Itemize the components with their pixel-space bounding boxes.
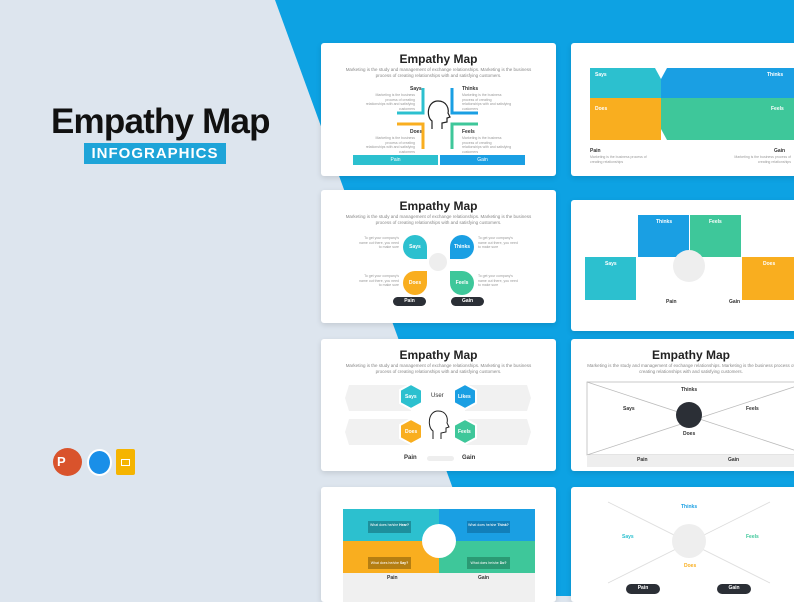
- card 5: hexagons: Pain: [404, 455, 417, 461]
- card 8: x lines with pills: Pain: [638, 585, 648, 591]
- card 2: four colored panels: Feels: [771, 106, 784, 112]
- card 3: petals: To get your company's name out there, you need to make sure: [478, 236, 518, 249]
- card 1: empathy map with head: [321, 43, 556, 176]
- card 6: x-frame: Empathy Map: [652, 348, 730, 362]
- card 8: x lines with pills: [571, 487, 794, 602]
- card 7: quadrants: What does he/she Do?: [470, 561, 506, 565]
- card 1: empathy map with head: Does: [410, 129, 422, 135]
- card 4: boxes: Feels: [709, 219, 722, 225]
- card 6: x-frame: Gain: [728, 457, 739, 463]
- card 2: four colored panels: Thinks: [767, 72, 783, 78]
- card 6: x-frame: Pain: [637, 457, 648, 463]
- card 6: x-frame: Says: [623, 406, 635, 412]
- card 3: petals: Does: [409, 280, 421, 286]
- card 8: x lines with pills: Feels: [746, 534, 759, 540]
- card 4: boxes: Thinks: [656, 219, 672, 225]
- card 2: four colored panels: Gain: [774, 148, 785, 154]
- card 2: four colored panels: Does: [595, 106, 607, 112]
- card 1: empathy map with head: Marketing is the business process of creating relationships with and satisfying customers: [366, 136, 415, 154]
- card 3: petals: [321, 190, 556, 323]
- card 7: quadrants: [321, 487, 556, 602]
- icon: powerpoint: P: [57, 454, 66, 469]
- card 3: petals: Empathy Map: [399, 199, 478, 213]
- card 7: quadrants: What does he/she Hear?: [370, 523, 409, 527]
- icon: keynote: [87, 449, 112, 476]
- card 3: petals: To get your company's name out there, you need to make sure: [359, 274, 399, 287]
- card 3: petals: To get your company's name out there, you need to make sure: [478, 274, 518, 287]
- card 1: empathy map with head: Marketing is the business process of creating relationships with and satisfying customers: [462, 136, 511, 154]
- card 6: x-frame: Feels: [746, 406, 759, 412]
- card 5: hexagons: Gain: [462, 455, 475, 461]
- card 1: empathy map with head: Marketing is the business process of creating relationships with and satisfying customers: [462, 93, 511, 110]
- card 1: empathy map with head: Marketing is the business process of creating relationships with and satisfying customers: [366, 93, 415, 110]
- card 1: empathy map with head: Feels: [462, 129, 475, 135]
- card 1: empathy map with head: Pain: [390, 157, 400, 163]
- card 5: hexagons: User: [431, 393, 444, 399]
- app icons: [53, 448, 135, 476]
- card 3: petals: Marketing is the study and management of exchange relationships. Marketing is the business process of creating relationships with and satisfying customers.: [346, 214, 531, 225]
- title: Empathy Map: [51, 102, 270, 141]
- card 3: petals: Pain: [404, 298, 415, 304]
- card 3: petals: Thinks: [454, 244, 470, 250]
- card 2: four colored panels: Marketing is the business process of creating relationships: [590, 155, 647, 164]
- card 6: x-frame: Marketing is the study and management of exchange relationships. Marketing is the business process of creating relationships with and satisfying customers.: [587, 363, 794, 374]
- card 4: boxes: Says: [605, 261, 617, 267]
- card 3: petals: To get your company's name out there, you need to make sure: [359, 236, 399, 249]
- card 8: x lines with pills: Says: [622, 534, 634, 540]
- card 7: quadrants: Pain: [387, 575, 398, 581]
- card 3: petals: Says: [409, 244, 421, 250]
- card 3: petals: Feels: [456, 280, 468, 286]
- card 5: hexagons: Likes: [458, 394, 471, 400]
- card 8: x lines with pills: Does: [684, 563, 696, 569]
- card 7: quadrants: What does he/she Think?: [468, 523, 509, 527]
- card 1: empathy map with head: Empathy Map: [399, 52, 478, 66]
- card 7: quadrants: Gain: [478, 575, 489, 581]
- card 4: boxes: Gain: [729, 299, 740, 305]
- card 5: hexagons: Feels: [458, 429, 471, 435]
- card 5: hexagons: Does: [405, 429, 417, 435]
- card 8: x lines with pills: Thinks: [681, 504, 697, 510]
- card 5: hexagons: Empathy Map: [399, 348, 478, 362]
- icon: slides: [116, 449, 135, 475]
- card 4: boxes: [571, 200, 794, 331]
- card 5: hexagons: Marketing is the study and management of exchange relationships. Marketing is the business process of creating relationships with and satisfying customers.: [346, 363, 531, 374]
- card 5: hexagons: [321, 339, 556, 471]
- card 2: four colored panels: [571, 43, 794, 176]
- card 2: four colored panels: Pain: [590, 148, 601, 154]
- card 2: four colored panels: Says: [595, 72, 607, 78]
- card 1: empathy map with head: Marketing is the study and management of exchange relationships. Marketing is the business process of creating relationships with and satisfying customers.: [346, 67, 531, 78]
- subtitle badge: INFOGRAPHICS: [91, 145, 218, 162]
- card 1: empathy map with head: Gain: [477, 157, 488, 163]
- card 4: boxes: Pain: [666, 299, 677, 305]
- card 1: empathy map with head: Says: [410, 86, 422, 92]
- card 2: four colored panels: Marketing is the business process of creating relationships: [734, 155, 791, 164]
- card 7: quadrants: What does he/she Say?: [371, 561, 408, 565]
- icon: powerpoint: [53, 448, 82, 476]
- card 6: x-frame: Does: [683, 431, 695, 437]
- card 4: boxes: Does: [763, 261, 775, 267]
- card 8: x lines with pills: Gain: [728, 585, 740, 591]
- card 6: x-frame: Thinks: [681, 387, 697, 393]
- card 3: petals: Gain: [462, 298, 473, 304]
- card 1: empathy map with head: Thinks: [462, 86, 478, 92]
- card 5: hexagons: Says: [405, 394, 417, 400]
- card 6: x-frame: [571, 339, 794, 471]
